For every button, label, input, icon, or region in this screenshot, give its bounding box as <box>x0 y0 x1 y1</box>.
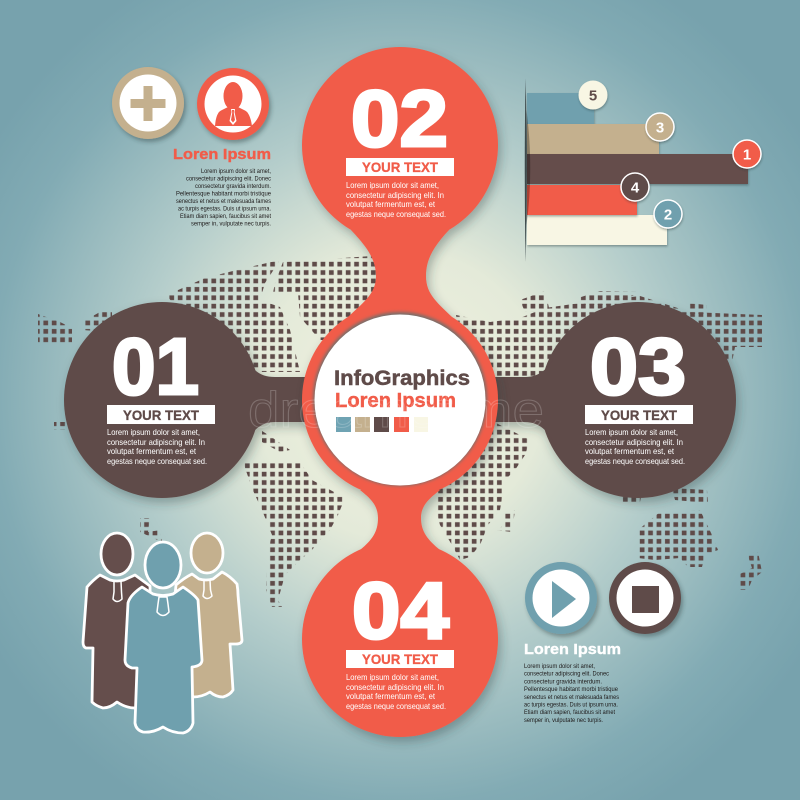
bar 4 <box>527 185 637 215</box>
body text: consectetur adipiscing elit. In <box>107 438 205 447</box>
badge 2 <box>654 200 682 228</box>
person brown <box>83 533 152 708</box>
number 02: 02 <box>351 74 448 163</box>
body text: consectetur adipiscing elit. In <box>585 438 683 447</box>
icon: person <box>197 68 269 140</box>
number 04: 04 <box>352 566 450 655</box>
heading: bottom-right: Loren Ipsum <box>524 641 621 658</box>
watermark: dreamstime <box>248 382 544 438</box>
bar 5 <box>527 93 594 124</box>
bar 2 <box>527 215 667 245</box>
text block: bottom-right: Pellentesque habitant morbi tristique <box>524 686 618 693</box>
panel 03 brown circle <box>540 302 736 498</box>
axis <box>525 78 527 262</box>
body text <box>346 181 446 219</box>
text block: bottom-right: senectus et netus et malesuada fames <box>524 694 619 701</box>
label: YOUR TEXT <box>362 651 438 667</box>
label: YOUR TEXT <box>601 407 677 423</box>
text block: top-left: senectus et netus et malesuada fames <box>176 198 271 205</box>
text block: top-left: Lorem ipsum dolor sit amet, <box>201 168 271 175</box>
panel 01 text <box>107 322 215 466</box>
text block: bottom-right: ac turpis egestas. Duis ut ipsum urna. <box>524 702 618 708</box>
body text: Lorem ipsum dolor sit amet, <box>346 673 439 682</box>
text block: top-left: Pellentesque habitant morbi tristique <box>176 190 271 198</box>
vertical necks <box>345 230 455 550</box>
panel 02 text <box>346 74 454 219</box>
text block: top-left: ac turpis egestas. Duis ut ipsum urna. <box>178 206 271 212</box>
badge 5 <box>578 80 608 110</box>
body text: Lorem ipsum dolor sit amet, <box>346 181 439 190</box>
body text: Lorem ipsum dolor sit amet, <box>585 428 678 437</box>
panel 01 brown circle <box>64 302 260 498</box>
text block: top-left: semper in, vulputate nec turpis. <box>191 220 271 228</box>
badge 4: 4 <box>631 180 640 196</box>
central white disc <box>313 312 487 486</box>
icon: plus <box>112 67 184 139</box>
body text <box>346 673 446 711</box>
text block: bottom-right: Lorem ipsum dolor sit amet, <box>524 663 595 670</box>
world map of dots <box>38 256 762 607</box>
colour swatches <box>336 417 428 432</box>
heading: top-left: Loren Ipsum <box>173 146 271 163</box>
person blue <box>125 542 202 733</box>
label bar <box>346 158 454 176</box>
body text: egestas neque consequat sed. <box>107 457 207 466</box>
center title: InfoGraphics <box>334 367 470 390</box>
person tan <box>170 533 242 697</box>
body text: egestas neque consequat sed. <box>346 210 446 219</box>
axis shading <box>526 110 530 225</box>
body text: volutpat fermentum est, et <box>346 692 436 701</box>
label: YOUR TEXT <box>123 407 199 423</box>
number 01: 01 <box>112 322 199 411</box>
body text: egestas neque consequat sed. <box>346 702 446 711</box>
number 03: 03 <box>590 322 686 411</box>
bar chart <box>525 78 761 262</box>
badge 5: 5 <box>589 88 597 104</box>
badge 1: 1 <box>743 146 751 164</box>
text block: bottom-right <box>524 663 619 724</box>
label bar <box>107 405 215 424</box>
icon: group of people <box>83 533 242 733</box>
badge 3: 3 <box>656 120 664 136</box>
bar 3 <box>527 124 659 154</box>
body text: Lorem ipsum dolor sit amet, <box>107 428 200 437</box>
circle 04 <box>302 541 498 737</box>
icon: play <box>525 562 597 634</box>
text block: bottom-right: Etiam diam sapien, faucibus sit amet <box>524 709 615 716</box>
body text: egestas neque consequat sed. <box>585 457 685 466</box>
text block: bottom-right: consectetur gravida interdum. <box>524 678 602 685</box>
panel 04 text <box>346 566 454 711</box>
body text: volutpat fermentum est, et <box>107 447 197 456</box>
badge 3 <box>646 113 674 141</box>
label: YOUR TEXT <box>362 159 438 175</box>
label bar <box>346 650 454 668</box>
central ring <box>302 302 498 498</box>
text block: bottom-right: semper in, vulputate nec turpis. <box>524 717 603 724</box>
label bar <box>585 405 693 424</box>
body text: volutpat fermentum est, et <box>346 200 436 209</box>
text block: top-left: consectetur gravida interdum. <box>195 183 271 190</box>
icon: stop <box>609 562 681 634</box>
badge 4 <box>621 173 649 201</box>
body text <box>107 428 207 466</box>
panel: red central shape with 02 and 04 <box>302 47 498 737</box>
brown connector band <box>246 358 554 442</box>
badge 1 <box>733 140 761 168</box>
panel: 01 and 03 brown connector <box>64 302 736 498</box>
body text: consectetur adipiscing elit. In <box>346 191 444 200</box>
bar 1 <box>527 154 748 184</box>
badge 2: 2 <box>664 206 672 224</box>
text block: top-left: consectetur adipiscing elit. Donec <box>186 176 271 182</box>
body text <box>585 428 685 466</box>
text block: bottom-right: consectetur adipiscing elit. Donec <box>524 671 609 678</box>
text block: top-left: Etiam diam sapien, faucibus sit amet <box>180 213 271 220</box>
center subtitle: Loren Ipsum <box>335 390 456 412</box>
body text: consectetur adipiscing elit. In <box>346 683 444 692</box>
circle 02 <box>302 47 498 243</box>
body text: volutpat fermentum est, et <box>585 447 675 456</box>
text block: top-left <box>176 168 271 228</box>
panel 03 text <box>585 322 693 466</box>
